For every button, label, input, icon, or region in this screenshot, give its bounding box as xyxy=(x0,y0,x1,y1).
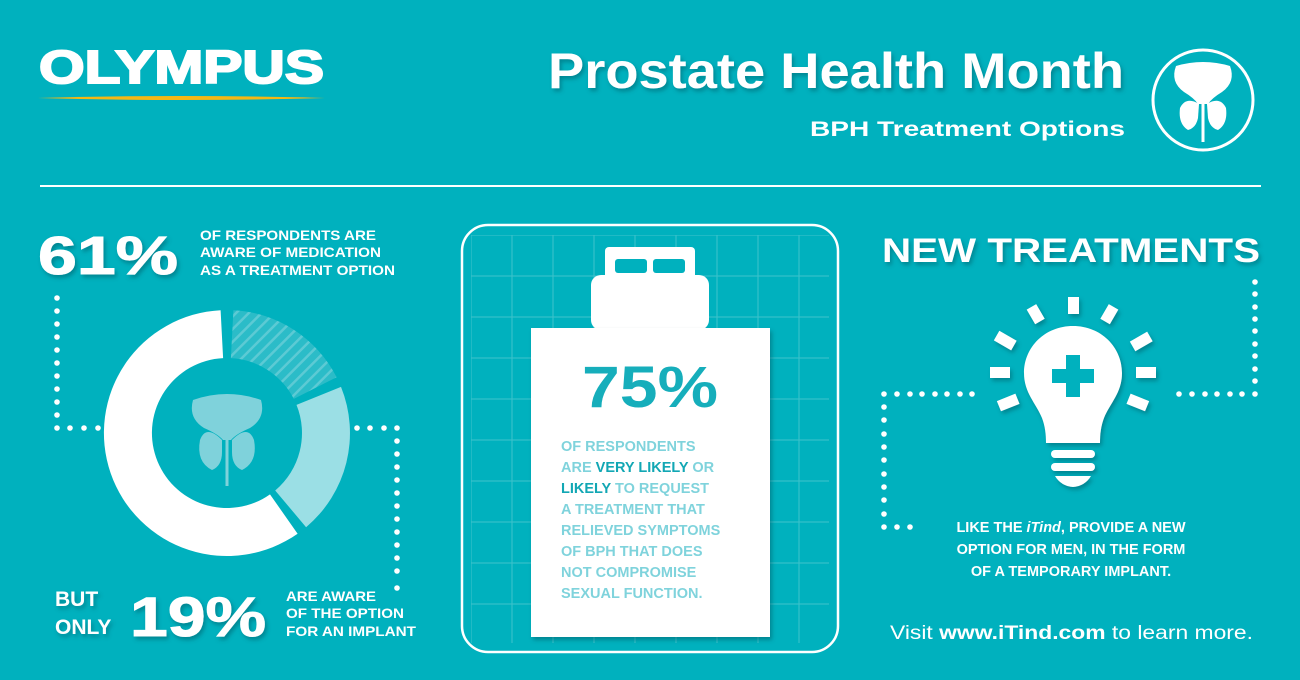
text: new treatments description: LIKE THE iTind, PROVIDE A NEW xyxy=(956,520,1186,536)
cross in bulb xyxy=(1052,355,1094,397)
sheet card: OF RESPONDENTS xyxy=(561,439,696,455)
sheet card xyxy=(531,328,770,637)
text: new treatments description: OF A TEMPORARY IMPLANT. xyxy=(971,564,1171,580)
sheet card: LIKELY TO REQUEST xyxy=(561,481,709,497)
text: new treatments description: OPTION FOR MEN, IN THE FORM xyxy=(957,542,1185,558)
sheet card: ARE VERY LIKELY OR xyxy=(561,460,715,476)
logo: OLYMPUS xyxy=(38,41,325,100)
text: new treatments description xyxy=(956,520,1186,580)
sheet card: OF BPH THAT DOES xyxy=(561,544,703,560)
donut chart xyxy=(104,310,350,556)
sheet card: RELIEVED SYMPTOMS xyxy=(561,523,721,539)
icon: bed xyxy=(591,247,709,330)
footer link text: Visit www.iTind.com to learn more. xyxy=(890,623,1253,644)
stat: 61% xyxy=(38,226,395,286)
stat: 19% xyxy=(55,585,416,648)
dotted connector right of donut xyxy=(354,425,400,591)
sheet card: 75% xyxy=(582,355,718,420)
icon: prostate in circle xyxy=(1153,50,1253,150)
title: Prostate Health Month xyxy=(548,43,1124,99)
stat: 19%: ARE AWARE xyxy=(286,588,376,604)
icon: lightbulb with cross xyxy=(990,297,1156,487)
stat: 19%: 19% xyxy=(130,585,266,648)
stat: 61%: AWARE OF MEDICATION xyxy=(200,244,381,260)
stat: 61%: OF RESPONDENTS ARE xyxy=(200,227,376,243)
stat: 61%: AS A TREATMENT OPTION xyxy=(200,262,395,278)
dotted connector left xyxy=(54,295,101,431)
sheet card: SEXUAL FUNCTION. xyxy=(561,586,703,602)
stat: 19%: OF THE OPTION xyxy=(286,605,404,621)
logo: OLYMPUS: OLYMPUS xyxy=(39,41,324,93)
dotted connector right top xyxy=(1176,279,1258,397)
stat: 19%: ONLY xyxy=(55,616,111,639)
sheet card: NOT COMPROMISE xyxy=(561,565,697,581)
dotted connector left bottom xyxy=(881,391,975,530)
divider xyxy=(40,185,1261,187)
panel: bed 75% xyxy=(462,225,838,652)
stat: 61%: 61% xyxy=(38,226,178,286)
sheet card: A TREATMENT THAT xyxy=(561,502,705,518)
heading: NEW TREATMENTS: NEW TREATMENTS xyxy=(882,232,1260,270)
icon: prostate in donut center xyxy=(192,394,262,486)
subtitle: BPH Treatment Options xyxy=(810,118,1125,141)
stat: 19%: BUT xyxy=(55,588,98,611)
stat: 19%: FOR AN IMPLANT xyxy=(286,623,416,639)
